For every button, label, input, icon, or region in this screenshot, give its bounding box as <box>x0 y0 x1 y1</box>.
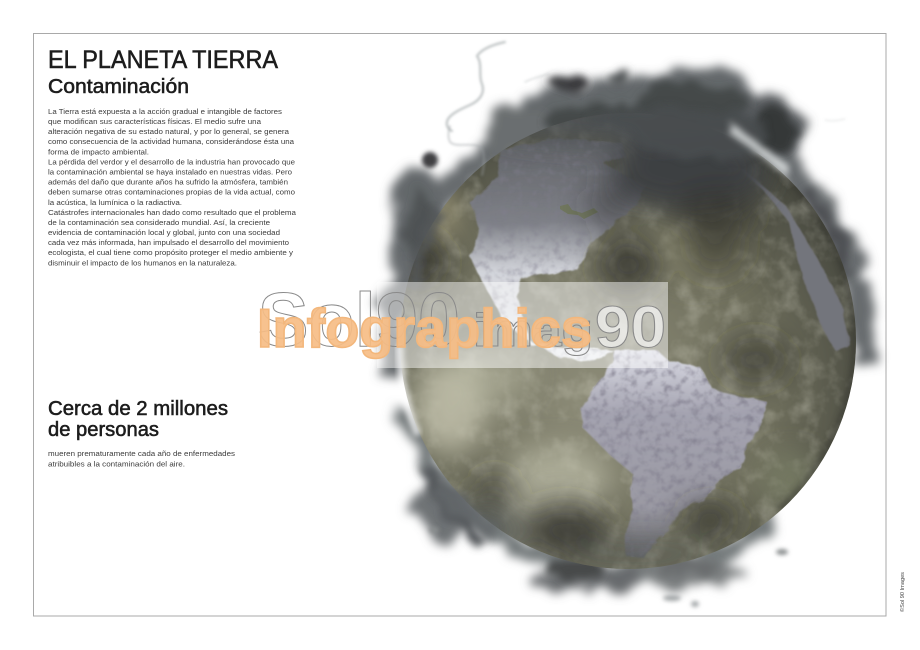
watermark: Sol90 images: Sol90 <box>258 278 460 363</box>
dark smoke mass behind limb <box>405 69 848 580</box>
body text: además del daño que durante años ha sufrido la atmósfera, también <box>48 178 288 187</box>
watermark: Sol90 images <box>258 278 666 363</box>
small smoke puffs <box>422 152 788 607</box>
body text <box>48 107 297 267</box>
right limb shadow <box>760 155 855 510</box>
watermark: Infographics: Infographics <box>257 297 592 359</box>
body text: deben sumarse otras contaminaciones propias de la vida actual, como <box>48 188 295 197</box>
statistic text: atribuibles a la contaminación del aire. <box>48 460 185 468</box>
North America texture <box>472 140 603 360</box>
credit: ©Sol 90 Images <box>899 572 906 612</box>
body text: de la contaminación sea considerado mundial. Así, la creciente <box>48 218 270 227</box>
ocean texture <box>395 110 865 575</box>
back smoke halo <box>389 66 864 592</box>
body text: La pérdida del verdor y el desarrollo de la industria han provocado que <box>48 157 295 166</box>
body text: forma de impacto ambiental. <box>48 147 149 156</box>
body text: como consecuencia de la actividad humana, considerándose ésta una <box>48 137 295 146</box>
South America texture <box>578 348 770 560</box>
watermark panel <box>377 282 668 368</box>
dark smoke over globe <box>394 100 789 567</box>
body text: ecologista, el cual tiene como propósito proteger el medio ambiente y <box>48 248 293 257</box>
South America <box>580 350 767 557</box>
statistic heading <box>48 398 228 441</box>
statistic heading: Cerca de 2 millones <box>48 398 228 420</box>
subtitle: Contaminación <box>48 76 189 98</box>
Africa and Europe limb <box>754 180 851 352</box>
pale ocean haze <box>414 185 818 543</box>
front smoke over limb <box>412 106 775 530</box>
body text: alteración negativa de su estado natural, y por lo general, se genera <box>48 127 290 136</box>
white haze between clouds <box>730 128 790 172</box>
watermark: Sol90 images: imag <box>473 304 593 356</box>
body text: la contaminación ambiental se haya instalado en nuestras vidas. Pero <box>48 168 292 176</box>
body text: Catástrofes internacionales han dado como resultado que el problema <box>48 208 297 217</box>
North America <box>470 137 647 362</box>
body text: evidencia de contaminación local y global, junto con una sociedad <box>48 228 280 237</box>
body text: cada vez más informada, han impulsado el desarrollo del movimiento <box>48 238 289 247</box>
white haze on lower-left limb <box>400 345 418 435</box>
Great Lakes <box>560 204 598 219</box>
body text: la acústica, la lumínica o la radiactiva. <box>48 198 182 207</box>
statistic text <box>48 449 235 468</box>
body text: que modifican sus características físicas. El medio sufre una <box>48 117 262 126</box>
body text: disminuir el impacto de los humanos en la naturaleza. <box>48 258 237 267</box>
statistic heading: de personas <box>48 419 159 441</box>
statistic text: mueren prematuramente cada año de enfermedades <box>48 449 235 458</box>
smoke wisps <box>447 42 845 175</box>
watermark: Sol90 images: 90 <box>595 295 666 360</box>
illustration: polluted Earth globe <box>389 42 865 607</box>
body text: La Tierra está expuesta a la acción gradual e intangible de factores <box>48 107 282 116</box>
title: EL PLANETA TIERRA <box>48 46 278 74</box>
globe sphere <box>400 113 856 569</box>
